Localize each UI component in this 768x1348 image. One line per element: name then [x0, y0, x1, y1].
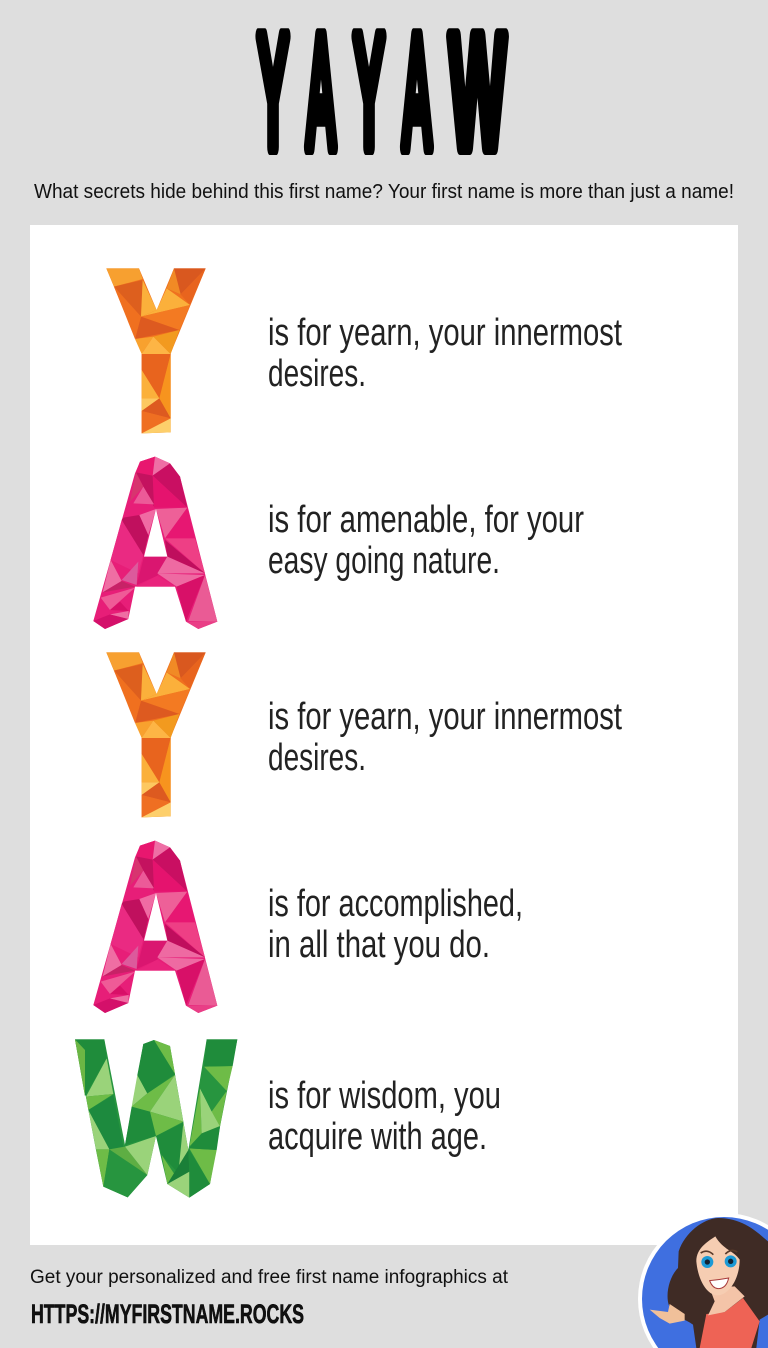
text: second Y meaning: is for yearn, your innermost: [268, 696, 622, 738]
icon: letter W: [75, 1039, 237, 1198]
footer call to action: Get your personalized and free first name infographics at: [30, 1267, 509, 1288]
icon: letter A: [93, 457, 217, 629]
text: first Y meaning: desires.: [268, 353, 366, 395]
panel: name letters: [30, 225, 738, 1245]
footer url: HTTPS://MYFIRSTNAME.ROCKS: [31, 1299, 304, 1329]
text: first A meaning: is for amenable, for your: [268, 499, 584, 541]
text: first A meaning: easy going nature.: [268, 540, 500, 582]
icon: letter Y: [106, 652, 206, 817]
icon: letter A: [93, 841, 217, 1013]
text: second Y meaning: [268, 696, 622, 779]
title: [257, 2, 506, 182]
text: first A meaning: [268, 499, 584, 582]
icon: avatar: [638, 1213, 768, 1348]
subtitle: What secrets hide behind this first name? Your first name is more than just a name!: [34, 181, 734, 203]
text: first Y meaning: is for yearn, your innermost: [268, 312, 622, 354]
text: W meaning: acquire with age.: [268, 1116, 487, 1158]
title: Y: [257, 2, 289, 182]
icon: letter Y: [106, 268, 206, 433]
text: second A meaning: [268, 883, 523, 966]
text: second A meaning: in all that you do.: [268, 924, 490, 966]
text: W meaning: [268, 1075, 501, 1158]
text: second Y meaning: desires.: [268, 737, 366, 779]
title: A: [305, 2, 337, 182]
text: second A meaning: is for accomplished,: [268, 883, 523, 925]
title: Y: [353, 2, 385, 182]
text: first Y meaning: [268, 312, 622, 395]
text: W meaning: is for wisdom, you: [268, 1075, 501, 1117]
title: A: [401, 2, 433, 182]
text: W: [449, 2, 506, 182]
